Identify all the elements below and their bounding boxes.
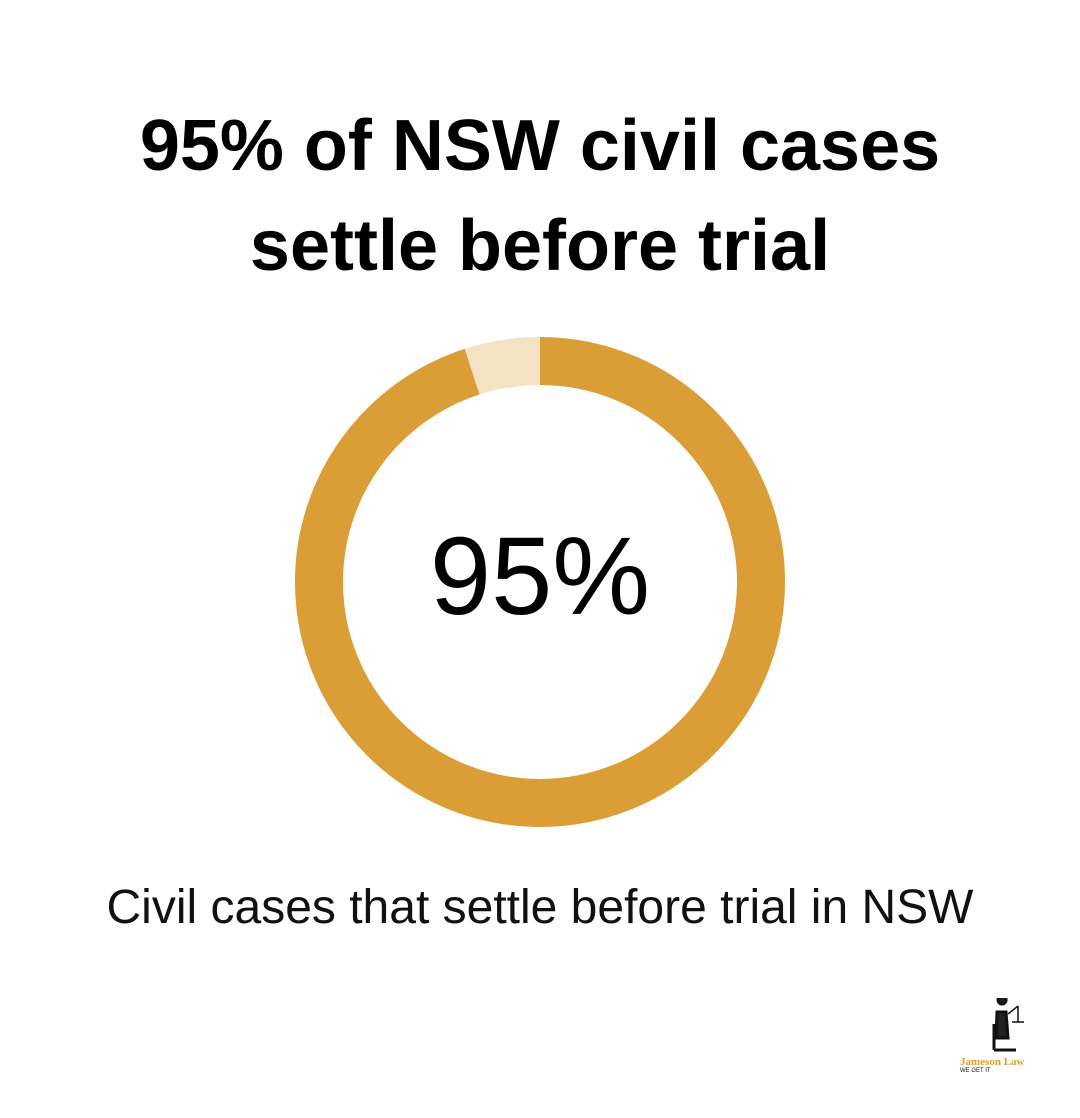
title: settle before trial [250,206,830,286]
title: 95% of NSW civil cases [140,106,940,186]
logo [960,998,1024,1074]
logo: WE GET IT [960,1068,991,1074]
title [140,106,940,286]
caption: Civil cases that settle before trial in NSW [106,881,973,934]
brand text: Jameson Law [960,1056,1024,1068]
icon: lady justice [992,998,1024,1052]
center value: 95% [430,515,650,638]
